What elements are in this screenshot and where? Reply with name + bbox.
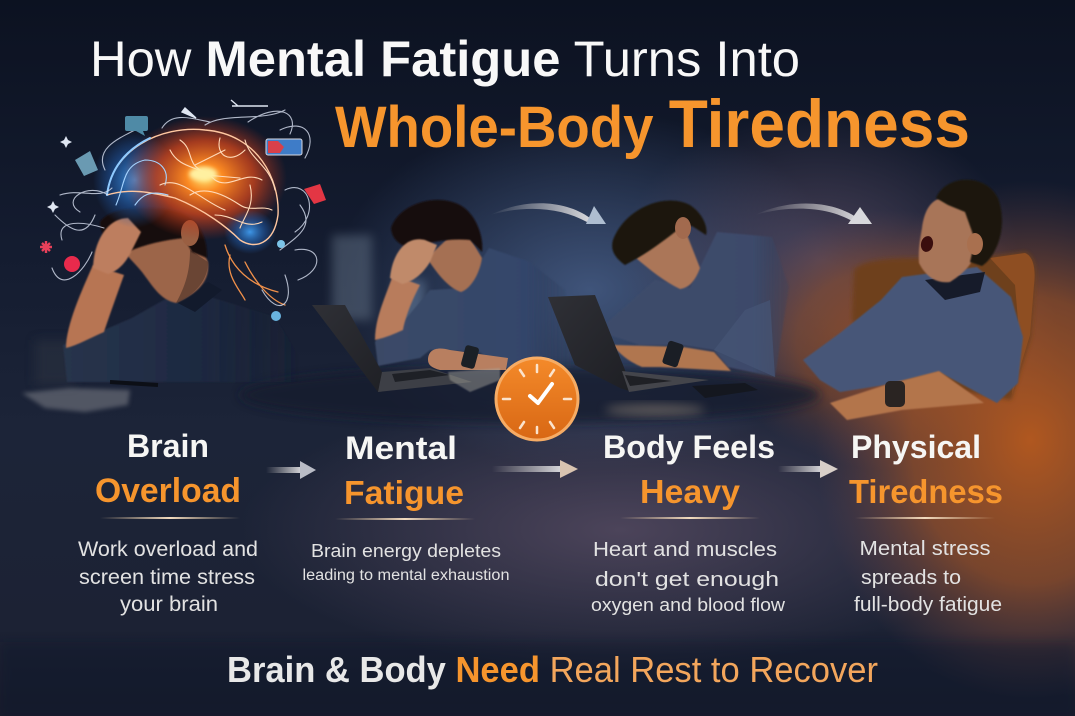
- illustration: mental fatigue man: [312, 200, 575, 392]
- step 3: body feels heavy: Heart and muscles: [593, 538, 777, 561]
- step 4: physical tiredness: Physical: [851, 429, 981, 465]
- illustration: body feels heavy man: [548, 200, 789, 416]
- man 3 face: [636, 222, 700, 289]
- man 2 forearm up: [375, 275, 420, 340]
- papers: [448, 368, 500, 392]
- curved arrow 1: [490, 203, 606, 224]
- man 2 face: [427, 225, 482, 292]
- man 1 hand: [93, 218, 141, 274]
- brain bright core: [189, 167, 217, 181]
- step 3: body feels heavy: Heavy: [640, 473, 741, 510]
- man 1 shadow jaw: [176, 250, 208, 303]
- papers on desk: [22, 388, 130, 412]
- man 1 ear: [181, 220, 199, 246]
- title: How Mental Fatigue Turns Into: [90, 31, 800, 87]
- step 2: mental fatigue: Fatigue: [344, 474, 464, 511]
- step 3: body feels heavy: Body Feels: [603, 429, 775, 465]
- phone: [692, 383, 758, 398]
- laptop: [312, 305, 390, 392]
- man 4 ear: [967, 233, 983, 255]
- step 1: brain overload: [78, 428, 258, 616]
- man 4 mouth: [919, 235, 935, 253]
- man 4 shirt: [803, 267, 1023, 403]
- man 3 hair: [612, 200, 707, 265]
- step 1: brain overload: Overload: [95, 472, 241, 510]
- brain veins: [52, 110, 317, 305]
- illustration: brain overload man: [22, 100, 326, 412]
- window glow: [395, 280, 425, 330]
- brain glow: [93, 132, 177, 228]
- arrow: step 2 to 3: [492, 460, 578, 478]
- step 3: body feels heavy: don't get enough: [595, 568, 779, 591]
- step 4: physical tiredness: [849, 429, 1003, 616]
- man 2 forearm lower: [428, 348, 508, 370]
- chair edge: [990, 253, 1035, 395]
- step 4: physical tiredness: spreads to: [861, 567, 961, 589]
- step 1: brain overload: Work overload and: [78, 538, 258, 561]
- man 3 shirt: [607, 232, 789, 377]
- man 1 hair: [100, 208, 207, 258]
- man 1 neck and face: [124, 222, 208, 303]
- step 2: mental fatigue: leading to mental exhaustion: [302, 567, 510, 584]
- step 4: physical tiredness: Mental stress: [860, 538, 990, 560]
- man 1 collar: [172, 282, 222, 312]
- man 4 hair: [936, 180, 1002, 266]
- step 2: mental fatigue: Mental: [345, 430, 457, 466]
- step 4: physical tiredness: Tiredness: [849, 473, 1003, 510]
- step 3: body feels heavy: [591, 429, 786, 615]
- step 2: mental fatigue: [302, 430, 510, 584]
- man 3 forearm: [613, 345, 731, 371]
- man 4 watch: [885, 381, 905, 407]
- man 2 hand: [390, 239, 437, 284]
- pen on desk: [110, 382, 158, 385]
- footer message: Brain & Body Need Real Rest to Recover: [227, 649, 878, 690]
- man 1 shirt: [63, 296, 300, 382]
- step 2: mental fatigue: Brain energy depletes: [311, 540, 501, 561]
- arrow: step 3 to 4: [778, 460, 838, 478]
- step 1: brain overload: screen time stress: [79, 566, 255, 589]
- stress icons: [40, 100, 326, 321]
- man 1 forearm: [66, 265, 124, 348]
- man 2 watch: [460, 345, 480, 369]
- title: Whole-Body Tiredness: [335, 86, 970, 162]
- step 1: brain overload: your brain: [120, 593, 218, 616]
- arrow: step 1 to 2: [266, 461, 316, 479]
- man 3 ear: [675, 217, 691, 239]
- man 3 sleeve fold: [714, 300, 775, 377]
- man 2 hair: [391, 200, 482, 252]
- chair: [852, 252, 1035, 400]
- man 3 watch: [662, 340, 684, 368]
- bookshelf blur left: [35, 340, 75, 385]
- desk surface: [240, 367, 820, 423]
- step 4: physical tiredness: full-body fatigue: [854, 594, 1002, 616]
- title: [90, 31, 970, 162]
- curved arrow 2: [755, 204, 872, 224]
- step 3: body feels heavy: oxygen and blood flow: [591, 595, 786, 615]
- illustration: physical tiredness man: [803, 180, 1035, 420]
- shelves blurred: [332, 235, 372, 320]
- clock icon: [496, 358, 578, 440]
- desk light: [605, 404, 705, 416]
- man 2 shirt: [375, 248, 575, 368]
- man 4 shirt shadow: [925, 272, 985, 300]
- step 1: brain overload: Brain: [127, 428, 209, 464]
- man 4 forearm: [830, 371, 984, 420]
- man 4 neck and face: [919, 198, 978, 282]
- laptop: [548, 295, 629, 391]
